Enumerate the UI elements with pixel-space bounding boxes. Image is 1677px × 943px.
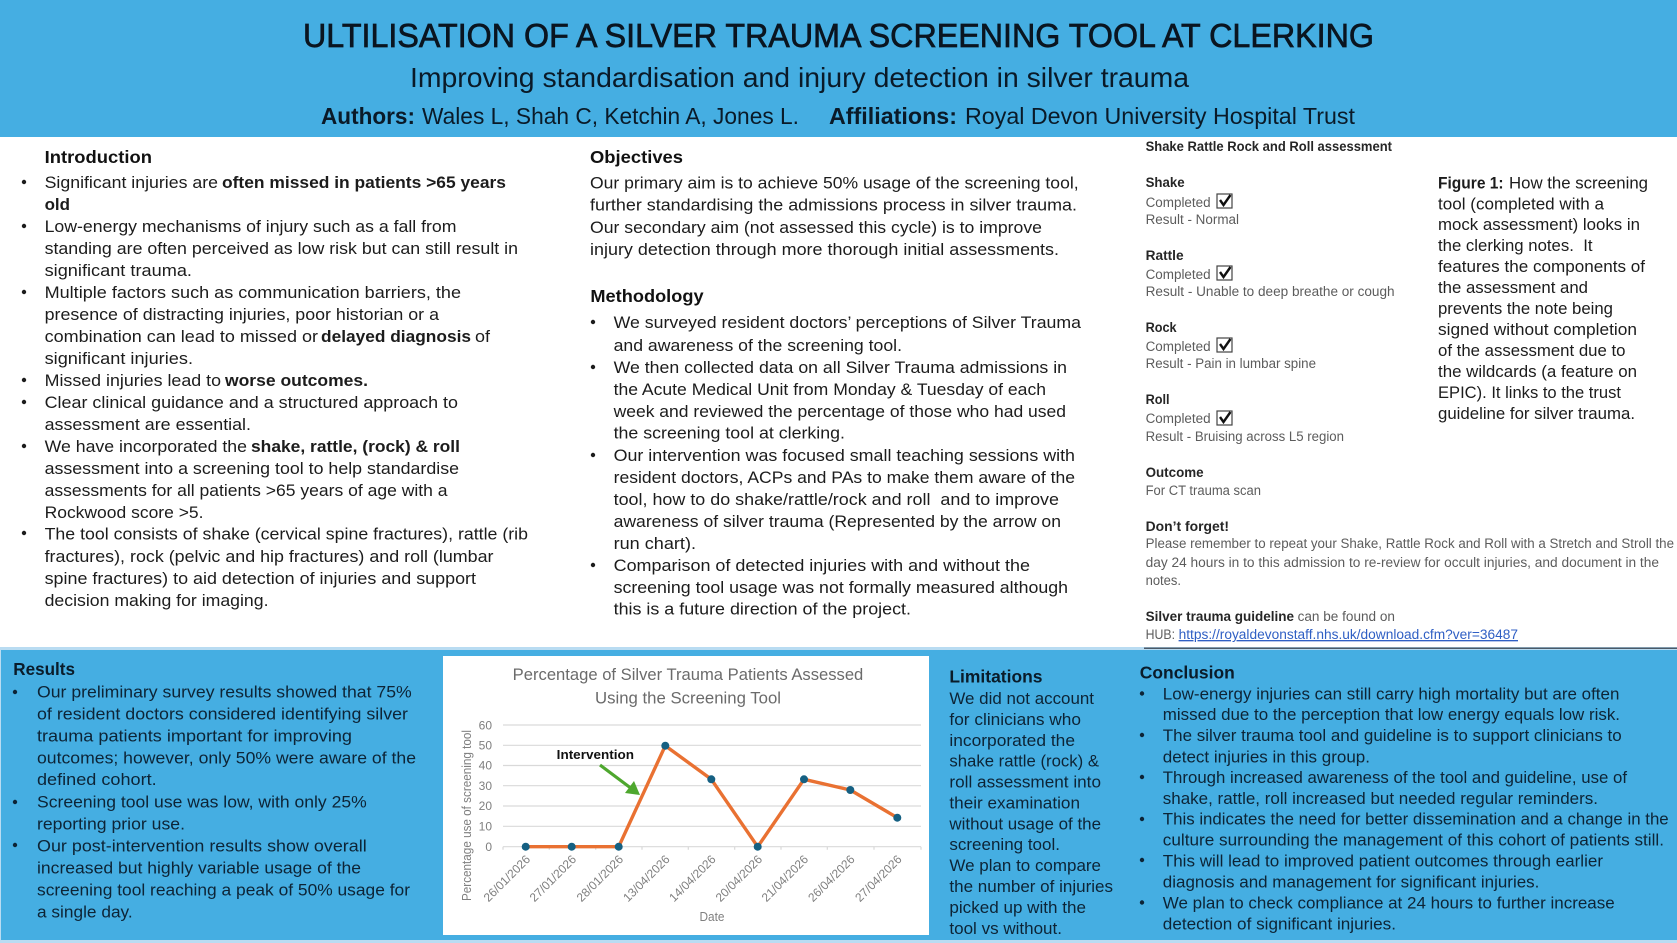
bullet list: methodology: this is a future direction of the project. [614,600,911,618]
bullet list: introduction: Missed injuries lead to [45,372,221,390]
text: objectives: injury detection through more thorough initial assessments. [590,241,1059,259]
item: rattle: Result - Unable to deep breathe or cough [1146,284,1395,299]
bullet list: introduction: decision making for imaging. [45,592,268,610]
bullet list: results [13,684,416,922]
x axis labels: 26/04/2026 [805,852,858,905]
panel: conclusion [1140,662,1669,934]
bullet list: introduction: Multiple factors such as communication barriers, the [45,284,461,302]
chart title [513,666,863,707]
bullet list: results: of resident doctors considered identifying silver [37,706,409,724]
item: shake: Shake [1146,175,1185,190]
bullet list: results: defined cohort. [37,771,157,789]
heading: conclusion: Conclusion [1140,662,1235,682]
item: guideline link: Silver trauma guideline [1146,609,1294,624]
bullet list: methodology: screening tool usage was not formally measured although [614,579,1068,597]
text: limitations: the number of injuries [949,878,1113,896]
authors and affiliations: Authors: [321,103,415,129]
bullet list: results: Our post-intervention results show overall [37,837,367,855]
figure caption: prevents the note being [1438,300,1613,318]
text: limitations [948,690,1113,938]
chart title: Percentage of Silver Trauma Patients Assessed [513,666,863,684]
bullet list: methodology: the Acute Medical Unit from Monday & Tuesday of each [614,381,1046,399]
item: reminder: Please remember to repeat your Shake, Rattle Rock and Roll with a Stretch and Stroll the [1146,536,1674,551]
figure caption: Figure 1: [1438,174,1504,192]
y axis labels: 40 [479,758,492,772]
figure caption: features the components of [1438,258,1645,276]
y axis labels: 0 [485,840,492,854]
bullet list: methodology: run chart). [614,535,696,553]
bullet list: results: Our preliminary survey results showed that 75% [37,684,412,702]
bullet list: introduction: of [475,328,490,346]
text: limitations: incorporated the [949,732,1075,750]
figure caption: guideline for silver trauma. [1438,405,1635,423]
bullet list: results: trauma patients important for improving [37,728,352,746]
bullet list: introduction: shake, rattle, (rock) & roll [251,438,460,456]
bullet list: introduction [22,174,528,610]
bullet list: results: Screening tool use was low, with only 25% [37,794,367,812]
item: guideline link: HUB: [1146,627,1175,642]
bullet list: conclusion: We plan to check compliance at 24 hours to further increase [1163,894,1615,912]
panel: screening tool screenshot [1146,139,1674,642]
text: objectives [590,174,1079,259]
bullet list: methodology: and awareness of the screening tool. [614,337,902,355]
panel: methodology [590,286,1082,618]
item: shake: Result - Normal [1146,212,1239,227]
bullet list: introduction: combination can lead to missed or [45,328,319,346]
bullet list: introduction: assessments for all patients >65 years of age with a [45,482,448,500]
bullet list: methodology: We surveyed resident doctors’ perceptions of Silver Trauma [614,314,1082,332]
bullet list: introduction: We have incorporated the [45,438,247,456]
bullet list: conclusion: Through increased awareness of the tool and guideline, use of [1163,769,1627,787]
bullet list: methodology: awareness of silver trauma (Represented by the arrow on [614,513,1061,531]
y axis labels [479,718,492,854]
x axis labels [481,852,905,905]
data points [522,742,901,851]
heading: assessment: Shake Rattle Rock and Roll assessment [1146,139,1392,154]
item: guideline link: can be found on [1298,609,1395,624]
x axis labels: 28/01/2026 [574,852,626,905]
bullet list: introduction: fractures), rock (pelvic and hip fractures) and roll (lumbar [45,548,494,566]
item: guideline link: https://royaldevonstaff.nhs.uk/download.cfm?ver=36487 [1179,627,1518,642]
header banner [0,0,1677,137]
y axis labels: 30 [479,779,492,793]
bullet list: conclusion: detection of significant injuries. [1163,916,1396,934]
bullet list: introduction: significant trauma. [45,262,192,280]
x axis labels: 21/04/2026 [759,852,811,905]
item: rock: Completed [1146,339,1211,354]
authors and affiliations: Wales L, Shah C, Ketchin A, Jones L. [422,103,799,129]
x axis labels: 27/01/2026 [527,852,579,905]
bullet list: introduction: The tool consists of shake (cervical spine fractures), rattle (rib [45,526,528,544]
bullet list: introduction: assessment into a screening tool to help standardise [45,460,459,478]
item: reminder: Don’t forget! [1146,519,1229,534]
bullet list: introduction: delayed diagnosis [321,328,471,346]
item: rattle: Completed [1146,267,1211,282]
figure caption: EPIC). It links to the trust [1438,384,1621,402]
bullet list: methodology: resident doctors, ACPs and PAs to make them aware of the [614,469,1075,487]
item: rattle [1146,248,1395,299]
x axis labels: 14/04/2026 [666,852,719,905]
text: limitations: picked up with the [949,899,1086,917]
authors and affiliations [321,103,1356,129]
text: objectives: further standardising the admissions process in silver trauma. [590,196,1077,214]
item: guideline link [1146,609,1518,642]
bullet list: introduction: presence of distracting injuries, poor historian or a [45,306,440,324]
bullet list: methodology: week and reviewed the percentage of those who had used [613,403,1066,421]
bullet list: methodology: tool, how to do shake/rattle/rock and roll and to improve [614,491,1059,509]
item: reminder: notes. [1146,573,1181,588]
bullet list: methodology [591,314,1082,618]
bullet list: methodology: We then collected data on all Silver Trauma admissions in [614,359,1067,377]
data line [526,746,897,847]
text: objectives: Our primary aim is to achieve 50% usage of the screening tool, [590,174,1079,192]
bullet list: results: reporting prior use. [37,815,185,833]
panel: limitations [948,666,1113,938]
item: shake [1146,175,1239,227]
panel: results [13,659,416,922]
item: outcome [1146,465,1261,498]
y axis labels: 10 [479,820,492,834]
item: rock: Rock [1146,320,1177,335]
figure caption: the clerking notes. It [1438,237,1593,255]
bullet list: methodology: the screening tool at clerking. [614,424,845,442]
item: outcome: For CT trauma scan [1146,483,1261,498]
bullet list: introduction: Significant injuries are [45,174,218,192]
item: reminder: day 24 hours in to this admission to re-review for occult injuries, and document in the [1146,555,1659,570]
subtitle: Improving standardisation and injury detection in silver trauma [410,62,1189,93]
bullet list: results: outcomes; however, only 50% were aware of the [37,749,416,767]
bullet list: introduction: old [45,196,70,214]
text: limitations: their examination [949,794,1080,812]
heading: methodology: Methodology [590,286,704,306]
bullet list: introduction: significant injuries. [45,350,193,368]
bullet list: conclusion: shake, rattle, roll increased but needed regular reminders. [1163,790,1598,808]
bullet list: introduction: Clear clinical guidance and a structured approach to [45,394,458,412]
text: limitations: for clinicians who [949,711,1081,729]
bottom band [0,647,1677,943]
bullet list: results: a single day. [37,904,133,922]
chart title: Using the Screening Tool [595,689,781,707]
text: limitations: roll assessment into [949,774,1101,792]
authors and affiliations: Affiliations: [829,103,957,129]
bullet list: conclusion: missed due to the perception that low energy equals low risk. [1163,706,1620,724]
bullet list: introduction: often missed in patients >65 years [222,174,506,192]
bullet list: introduction: Low-energy mechanisms of injury such as a fall from [45,218,456,236]
x axis labels: 20/04/2026 [713,852,765,905]
x axis labels: 26/01/2026 [481,852,533,905]
x axis title: Date [700,909,724,924]
item: shake: Completed [1146,195,1211,210]
bullet list: results: increased but highly variable usage of the [37,859,361,877]
text: limitations: We plan to compare [949,857,1101,875]
figure caption: How the screening [1509,174,1648,192]
heading: results: Results [13,659,75,679]
heading: introduction: Introduction [45,147,152,167]
item: roll [1146,392,1344,444]
bullet list: conclusion: detect injuries in this group. [1163,748,1370,766]
text: objectives: Our secondary aim (not assessed this cycle) is to improve [590,219,1042,237]
item: rock [1146,320,1316,371]
panel: objectives [590,147,1079,259]
bullet list: introduction: spine fractures) to aid detection of injuries and support [45,570,476,588]
y axis labels: 20 [479,799,492,813]
icon: intervention arrow [600,765,640,795]
text: limitations: shake rattle (rock) & [949,753,1099,771]
heading: limitations: Limitations [949,666,1043,686]
y axis labels: 60 [479,718,492,732]
item: outcome: Outcome [1146,465,1204,480]
heading: objectives: Objectives [590,147,683,167]
title: ULTILISATION OF A SILVER TRAUMA SCREENING TOOL AT CLERKING [303,18,1374,55]
authors and affiliations: Royal Devon University Hospital Trust [965,103,1356,129]
y axis title: Percentage use of screening tool [459,730,474,901]
text: limitations: screening tool. [949,836,1060,854]
bullet list: introduction: Rockwood score >5. [45,504,203,522]
bullet list: conclusion: diagnosis and management for significant injuries. [1163,874,1539,892]
item: roll: Result - Bruising across L5 region [1146,429,1344,444]
text: limitations: tool vs without. [949,920,1062,938]
y axis labels: 50 [479,738,492,752]
figure caption: the assessment and [1438,279,1588,297]
figure caption [1438,174,1648,423]
bullet list: methodology: Our intervention was focused small teaching sessions with [614,447,1075,465]
bullet list: conclusion: Low-energy injuries can still carry high mortality but are often [1163,685,1619,703]
line chart panel [443,656,929,935]
text: limitations: We did not account [949,690,1094,708]
figure caption: mock assessment) looks in [1438,216,1640,234]
bullet list: methodology: Comparison of detected injuries with and without the [614,557,1030,575]
figure caption: the wildcards (a feature on [1438,363,1637,381]
panel: introduction [22,147,528,610]
item: rock: Result - Pain in lumbar spine [1146,356,1316,371]
bullet list: introduction: worse outcomes. [224,372,368,390]
bullet list: conclusion: This will lead to improved patient outcomes through earlier [1163,852,1604,870]
x axis labels: 13/04/2026 [620,852,673,905]
item: reminder [1146,519,1674,588]
bullet list: introduction: assessment are essential. [45,416,251,434]
item: rattle: Rattle [1146,248,1184,263]
bullet list: results: screening tool reaching a peak of 50% usage for [37,882,411,900]
x axis labels: 27/04/2026 [852,852,905,905]
item: roll: Roll [1146,392,1170,407]
item: roll: Completed [1146,411,1211,426]
figure caption: tool (completed with a [1438,195,1605,213]
figure caption: of the assessment due to [1438,342,1626,360]
intervention label: Intervention [557,747,634,762]
bullet list: conclusion: The silver trauma tool and guideline is to support clinicians to [1163,727,1622,745]
bullet list: introduction: standing are often perceived as low risk but can still result in [45,240,518,258]
figure caption: signed without completion [1438,321,1637,339]
text: limitations: without usage of the [948,815,1101,833]
bullet list: conclusion [1140,685,1669,934]
bullet list: conclusion: This indicates the need for better dissemination and a change in the [1163,811,1669,829]
bullet list: conclusion: culture surrounding the management of this cohort of patients still. [1163,832,1664,850]
